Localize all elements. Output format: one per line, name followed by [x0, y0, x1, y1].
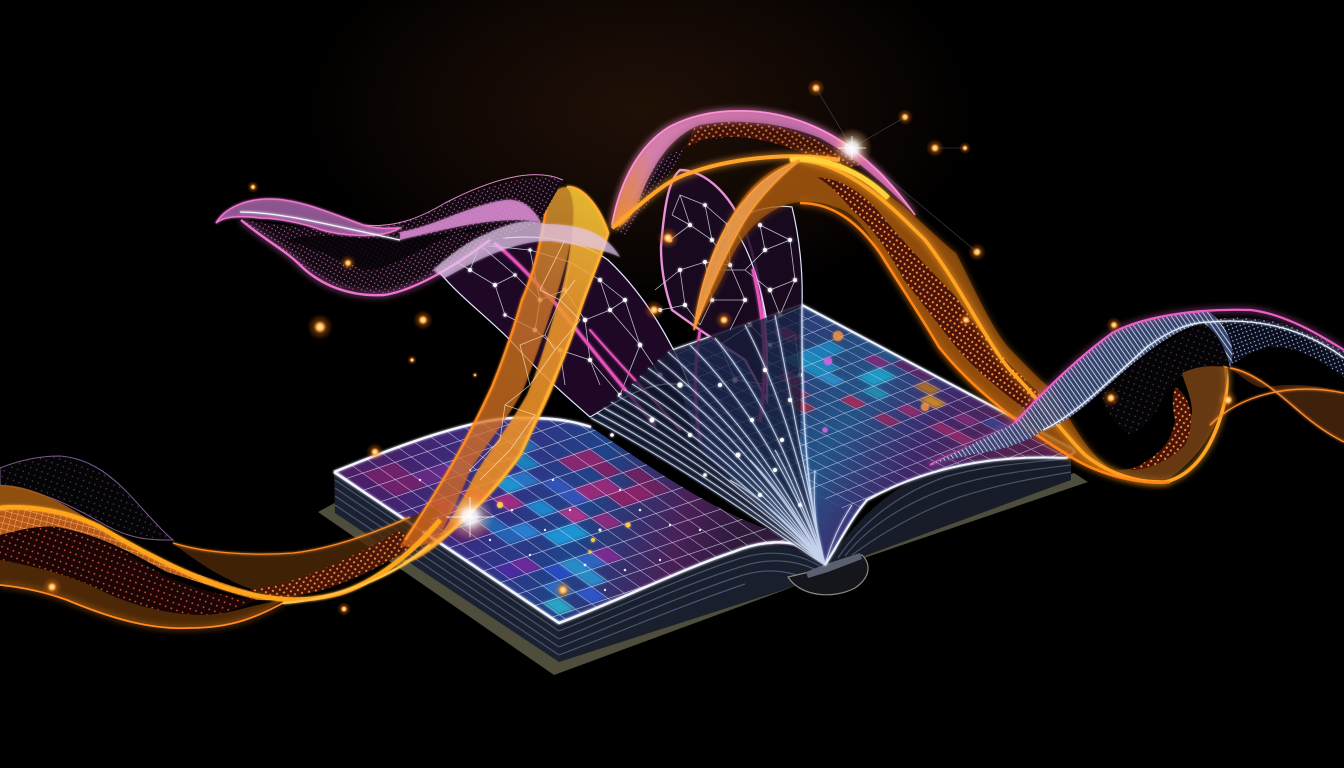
pink upper band	[216, 199, 400, 235]
ribbon: top pink arch	[612, 111, 915, 235]
pink lobe	[400, 200, 541, 240]
book cover board	[318, 473, 1088, 675]
right strand	[404, 187, 608, 563]
main bright strand	[800, 160, 1227, 482]
arch band	[612, 111, 915, 227]
lower pink edge	[241, 220, 490, 295]
loop network overlay	[470, 240, 580, 480]
spine tab	[788, 553, 868, 595]
orange mesh band	[0, 507, 283, 600]
fanning pages	[591, 305, 852, 565]
mesh sheets	[428, 170, 802, 440]
right page grid	[675, 306, 1070, 562]
dark right mesh	[1210, 318, 1344, 377]
lower amber fold	[0, 560, 283, 628]
upper orange strand from arch	[612, 156, 840, 228]
inner dark mesh	[1100, 322, 1230, 435]
loop band	[1015, 312, 1232, 430]
star flare: top arch	[832, 128, 872, 168]
lower dark red mesh	[0, 527, 257, 615]
fan nodes	[610, 368, 802, 507]
pink sheet strands	[460, 230, 764, 440]
yellow crest	[790, 159, 888, 198]
ribbon: left pink wave	[216, 175, 620, 295]
ribbon: right pink loop	[930, 310, 1344, 480]
upper amber fold	[0, 485, 100, 527]
fan lines	[591, 305, 852, 565]
star flare: left page	[446, 493, 494, 541]
left page grid	[336, 419, 804, 622]
rear fold mesh	[250, 530, 415, 598]
sparks	[42, 79, 1238, 616]
descent body	[694, 159, 1130, 478]
right arch	[694, 206, 802, 330]
ribbon: rising orange loop	[0, 187, 608, 603]
book	[318, 302, 1088, 675]
third arch orange band	[694, 160, 800, 330]
left sheet	[428, 237, 690, 417]
left page block	[334, 472, 832, 662]
orange tail	[1230, 368, 1344, 442]
arch mesh underside	[612, 136, 860, 235]
descent mesh	[817, 177, 1060, 425]
middle arch	[661, 170, 767, 400]
ribbon: lower-left orange wave	[0, 456, 440, 628]
inner loop mesh	[1130, 387, 1191, 470]
arch outer edge	[612, 111, 915, 225]
network lines	[450, 195, 800, 395]
loop top pink edge	[930, 310, 1344, 465]
upper dark mesh	[0, 456, 173, 540]
mesh belly	[241, 177, 563, 295]
loop edges	[0, 187, 608, 603]
dark gap in belly	[285, 227, 482, 270]
pale crossing band	[433, 221, 620, 278]
white highlight	[240, 212, 400, 240]
right page outline	[668, 305, 1075, 565]
rear rising fold	[173, 505, 440, 594]
constellation lines	[816, 88, 977, 252]
inner loop fold	[1115, 366, 1228, 480]
fan body	[591, 305, 825, 565]
loop white edge	[1043, 321, 1344, 430]
top mesh edge	[363, 175, 563, 226]
ribbon: big orange descent	[612, 156, 1227, 483]
left page outline	[334, 418, 812, 623]
network nodes	[468, 203, 802, 397]
right page block	[825, 450, 1071, 570]
tail edges	[1210, 368, 1344, 442]
crossing onto page	[930, 423, 1043, 465]
lower bright edge	[800, 203, 1170, 483]
left strand	[400, 187, 573, 547]
